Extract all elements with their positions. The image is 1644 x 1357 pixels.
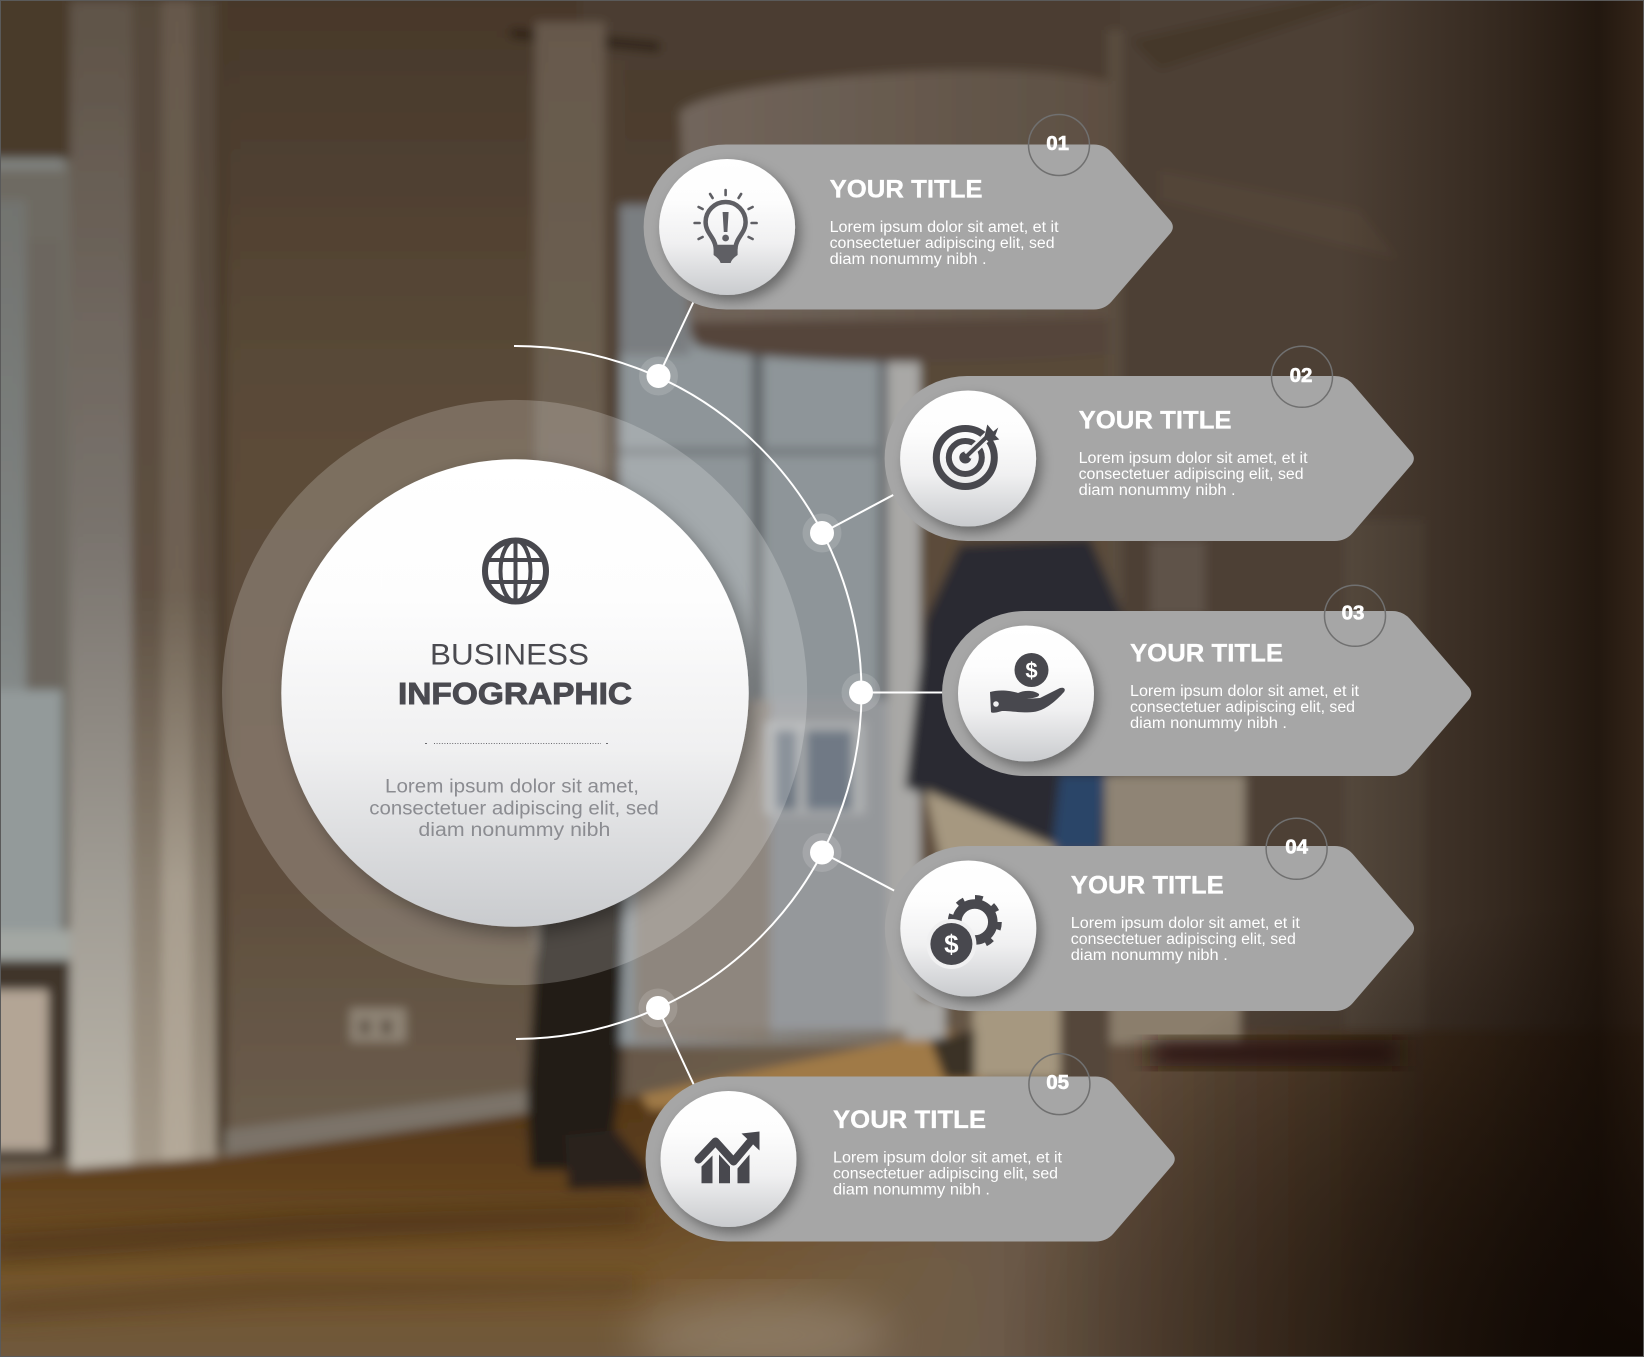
icon disc bbox=[659, 159, 795, 295]
description: Lorem ipsum dolor sit amet, et it bbox=[830, 219, 1059, 236]
icon disc bbox=[900, 390, 1036, 526]
description: Lorem ipsum dolor sit amet, et it bbox=[1071, 915, 1301, 932]
background: floor plank shading bbox=[0, 1205, 640, 1318]
description: consectetuer adipiscing elit, sed bbox=[833, 1166, 1058, 1182]
title: YOUR TITLE bbox=[833, 1106, 986, 1134]
number badge 04 bbox=[1266, 818, 1327, 879]
panel: item 04 bbox=[885, 818, 1414, 1011]
icon disc bbox=[958, 626, 1094, 762]
description: Lorem ipsum dolor sit amet, et it bbox=[1079, 450, 1308, 467]
background: soft highlight on the floor bbox=[630, 1295, 890, 1357]
description bbox=[830, 219, 1059, 268]
icon: hand holding coin: $ bbox=[1025, 658, 1038, 683]
number badge 03 bbox=[1324, 585, 1386, 646]
number badge 05 bbox=[1029, 1054, 1090, 1115]
panel: item 02 bbox=[885, 346, 1414, 541]
icon: rising chart bbox=[698, 1132, 760, 1183]
number badge 02 bbox=[1272, 346, 1332, 407]
number badge 02: 02 bbox=[1290, 364, 1312, 387]
number badge 01 bbox=[1028, 114, 1090, 176]
description: consectetuer adipiscing elit, sed bbox=[1130, 699, 1355, 716]
background: bottom right corner shadow bbox=[1000, 900, 1644, 1357]
text block: central description: diam nonummy nibh bbox=[418, 820, 610, 841]
icon: hand holding coin bbox=[990, 653, 1065, 713]
connector network: arc, spokes and nodes bbox=[514, 288, 960, 1098]
text block: central description: Lorem ipsum dolor sit amet, bbox=[385, 776, 639, 798]
number badge 03: 03 bbox=[1342, 602, 1364, 625]
description bbox=[1071, 915, 1301, 964]
description: diam nonummy nibh . bbox=[1071, 947, 1228, 964]
heading: business: BUSINESS bbox=[430, 638, 589, 672]
description: diam nonummy nibh . bbox=[830, 251, 987, 268]
number badge 05: 05 bbox=[1046, 1071, 1069, 1094]
icon: globe bbox=[485, 540, 546, 602]
icon disc bbox=[660, 1091, 796, 1227]
panel: item 05 bbox=[646, 1054, 1175, 1242]
heading: infographic: INFOGRAPHIC bbox=[398, 677, 632, 711]
background: shadow on floor under the curtains bbox=[1150, 1040, 1400, 1066]
panel: central white disc bbox=[281, 459, 749, 927]
description: Lorem ipsum dolor sit amet, et it bbox=[1130, 683, 1360, 700]
description bbox=[833, 1150, 1063, 1198]
title: YOUR TITLE bbox=[1071, 872, 1224, 900]
description: diam nonummy nibh . bbox=[1079, 482, 1236, 499]
title: YOUR TITLE bbox=[1130, 640, 1283, 668]
icon: gear and dollar coin: $ bbox=[944, 929, 959, 959]
background: right-hand darkening vignette bbox=[1340, 0, 1644, 1357]
icon disc bbox=[900, 860, 1036, 996]
text block: central description: consectetuer adipiscing elit, sed bbox=[369, 798, 659, 820]
icon: gear and dollar coin bbox=[926, 898, 998, 969]
number badge 04: 04 bbox=[1285, 836, 1309, 859]
title: YOUR TITLE bbox=[830, 176, 983, 204]
description bbox=[1130, 683, 1360, 732]
description bbox=[1079, 450, 1308, 499]
dotted divider bbox=[425, 742, 608, 744]
number badge 01: 01 bbox=[1046, 132, 1069, 155]
icon: target with arrow bbox=[936, 424, 999, 486]
panel: item 01 bbox=[644, 114, 1173, 310]
panel: translucent outer ring bbox=[222, 400, 807, 985]
description: consectetuer adipiscing elit, sed bbox=[830, 235, 1055, 252]
text block: central description bbox=[369, 776, 659, 841]
description: Lorem ipsum dolor sit amet, et it bbox=[833, 1150, 1063, 1166]
icon: light bulb bbox=[695, 190, 757, 263]
description: diam nonummy nibh . bbox=[833, 1182, 990, 1198]
description: consectetuer adipiscing elit, sed bbox=[1079, 466, 1304, 483]
description: diam nonummy nibh . bbox=[1130, 715, 1287, 732]
title: YOUR TITLE bbox=[1079, 406, 1232, 434]
description: consectetuer adipiscing elit, sed bbox=[1071, 931, 1296, 948]
panel: item 03 bbox=[942, 585, 1471, 776]
